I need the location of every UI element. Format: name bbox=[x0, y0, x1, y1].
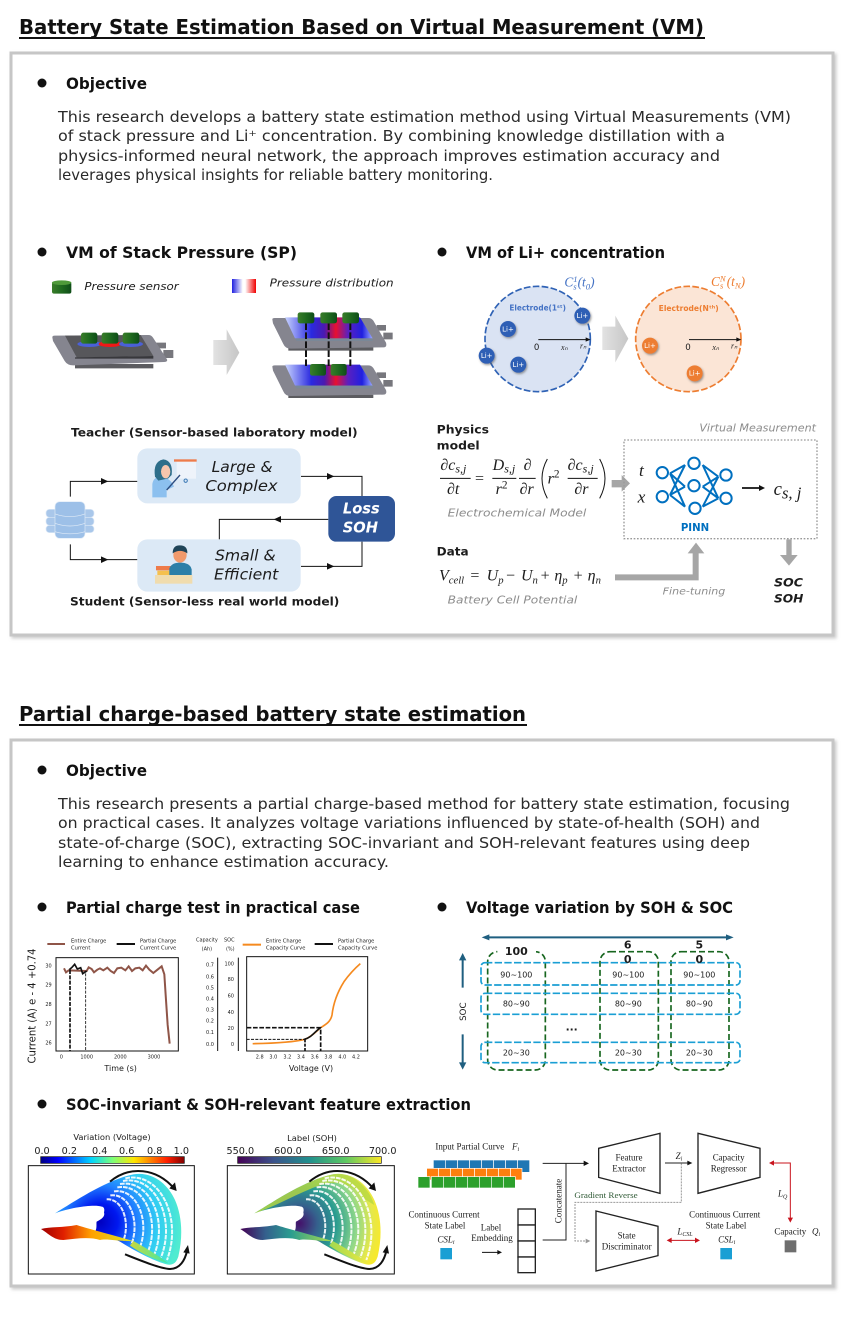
caption: electrochemical model: Electrochemical Model bbox=[448, 507, 586, 520]
equation: cell potential: p bbox=[561, 575, 568, 586]
icon: teacher bbox=[152, 459, 197, 497]
block: capacity regressor: Regressor bbox=[711, 1164, 747, 1174]
connector: concatenate bbox=[543, 1161, 589, 1240]
chart: current versus time: 1000 bbox=[80, 1054, 93, 1060]
output: capacity bbox=[774, 1226, 820, 1252]
labels: SOH values: 100 bbox=[505, 945, 528, 958]
text block: research objective: of stack pressure and Li⁺ concentration. By combining knowledge distillation with a bbox=[58, 127, 725, 145]
labels: SOC ranges: 20~30 bbox=[503, 1049, 530, 1058]
chart: capacity versus voltage bbox=[196, 938, 377, 1073]
block: feature extractor bbox=[599, 1133, 660, 1193]
label: SOC SOH outputs: SOH bbox=[774, 592, 804, 606]
title: partial charge estimation: Partial charge-based battery state estimation bbox=[19, 702, 526, 726]
plot: variation voltage: Variation (Voltage) bbox=[73, 1132, 151, 1142]
equation: diffusion: ∂r bbox=[574, 481, 589, 498]
input: continuous current state label bbox=[408, 1210, 480, 1259]
equation: cell potential: n bbox=[596, 575, 601, 586]
text block: research objective: leverages physical insights for reliable battery monitoring. bbox=[58, 166, 493, 184]
labels: SOC ranges: 90~100 bbox=[612, 970, 644, 979]
equation: cell potential: V bbox=[439, 568, 451, 585]
legend: current curves: Current bbox=[71, 946, 90, 952]
plot: variation voltage: 0.6 bbox=[119, 1146, 134, 1157]
icon: PINN network bbox=[657, 458, 732, 534]
label: teacher: Teacher (Sensor-based laboratory model) bbox=[71, 426, 358, 440]
equation: cell potential: cell bbox=[449, 575, 464, 586]
equation: diffusion: ∂t bbox=[447, 481, 460, 498]
chart: capacity versus voltage: 0.7 bbox=[206, 963, 214, 969]
arrow: physics to PINN bbox=[612, 475, 630, 492]
electrode: first cycle: (t bbox=[578, 275, 586, 290]
electrode: first cycle: 0 bbox=[534, 343, 539, 353]
labels: SOC ranges: 20~30 bbox=[686, 1049, 713, 1058]
chart: capacity versus voltage: 3.8 bbox=[324, 1054, 332, 1060]
chart: capacity versus voltage: 4.2 bbox=[352, 1054, 360, 1060]
input: partial curve blocks bbox=[418, 1141, 530, 1188]
chart: capacity versus voltage: 20 bbox=[228, 1026, 234, 1032]
legend: pressure distribution: Pressure distribution bbox=[270, 277, 394, 290]
box: loss SOH: Loss bbox=[343, 501, 380, 518]
equation: diffusion: D bbox=[493, 457, 504, 474]
electrode: Nth cycle bbox=[636, 273, 746, 392]
labels: SOC ranges bbox=[500, 970, 715, 1058]
chart: current versus time: 29 bbox=[45, 983, 52, 989]
heading: VM of Li+ concentration: VM of Li+ concentration bbox=[466, 243, 665, 262]
diagram: stack pressure virtual measurement bbox=[46, 277, 395, 609]
text: small and efficient: Efficient bbox=[214, 567, 280, 584]
plot: label SOH: 600.0 bbox=[274, 1146, 302, 1157]
legend: capacity curves: Partial Charge bbox=[338, 939, 374, 945]
icon: battery with sensors bbox=[52, 333, 173, 368]
heading: feature extraction: SOC-invariant & SOH-relevant feature extraction bbox=[66, 1095, 471, 1114]
plot: variation voltage: 0.8 bbox=[147, 1146, 162, 1157]
electrode: first cycle: ) bbox=[589, 275, 595, 290]
text block: research objective bbox=[57, 108, 791, 184]
text: small and efficient: Small & bbox=[215, 548, 276, 565]
electrode: Nth cycle: Li+ bbox=[689, 370, 701, 378]
input: continuous current state label: CSL bbox=[437, 1234, 453, 1244]
equation: cell potential: − bbox=[506, 568, 515, 585]
legend: pressure sensor: Pressure sensor bbox=[84, 280, 180, 293]
label: SOC SOH outputs bbox=[774, 575, 804, 606]
text block: research objective: This research develops a battery state estimation method using Virtual Measurements (VM) bbox=[57, 108, 791, 126]
legend: capacity curves: Capacity Curve bbox=[266, 946, 305, 952]
labels: SOC ranges: 90~100 bbox=[500, 970, 532, 979]
equation: diffusion: ∂c bbox=[440, 457, 455, 474]
icon: PINN network: PINN bbox=[681, 521, 709, 534]
output: continuous current state label bbox=[689, 1210, 761, 1259]
plot: label SOH: 550.0 bbox=[227, 1146, 254, 1157]
electrode: first cycle: 0 bbox=[586, 281, 591, 291]
label: c s,j: s, j bbox=[782, 483, 802, 502]
title: battery state estimation: Battery State Estimation Based on Virtual Measurement (VM) bbox=[19, 15, 704, 39]
axis: SOC bbox=[459, 953, 469, 1070]
text: large and complex: Large & bbox=[212, 459, 273, 476]
equation: diffusion bbox=[440, 457, 605, 498]
input: partial curve blocks: Input Partial Curve bbox=[435, 1141, 504, 1151]
box: virtual measurement: t bbox=[639, 461, 645, 480]
caption: virtual measurement: Virtual Measurement bbox=[699, 423, 817, 435]
plot: variation voltage: 0.0 bbox=[34, 1146, 50, 1157]
legend: current curves: Current Curve bbox=[140, 946, 176, 952]
text block: research objective: physics-informed neural network, the approach improves estimation accuracy and bbox=[58, 147, 720, 165]
equation: diffusion: 2 bbox=[554, 468, 560, 480]
chart: capacity versus voltage: 100 bbox=[224, 961, 234, 967]
electrode: first cycle: Electrode(1ˢᵗ) bbox=[509, 303, 566, 312]
loss: L Q: L bbox=[778, 1189, 783, 1199]
electrode: first cycle: xₙ bbox=[560, 343, 569, 352]
equation: diffusion: = bbox=[475, 470, 484, 487]
arrowheads bbox=[101, 473, 334, 570]
icon: upper battery with pressure map bbox=[272, 317, 393, 351]
label: label embedding: Embedding bbox=[471, 1233, 513, 1243]
panel: partial charge research bbox=[11, 740, 833, 1286]
plot: variation voltage bbox=[28, 1132, 194, 1274]
labels: SOC ranges: 80~90 bbox=[503, 1000, 530, 1009]
box: student model bbox=[137, 539, 301, 592]
label: data: Data bbox=[437, 545, 469, 559]
equation: cell potential: η bbox=[588, 568, 596, 585]
legend: pressure sensor bbox=[52, 280, 180, 294]
block: state discriminator: State bbox=[618, 1231, 636, 1241]
caption: fine-tuning: Fine-tuning bbox=[663, 587, 725, 598]
electrode: first cycle: Li+ bbox=[512, 361, 524, 369]
loss: L CSL: CSL bbox=[682, 1232, 693, 1238]
arrow: cycle progression bbox=[602, 316, 628, 362]
loss: L Q bbox=[769, 1160, 793, 1223]
electrode: Nth cycle: 0 bbox=[685, 343, 691, 353]
diagram: Li+ concentration virtual measurement bbox=[437, 273, 817, 607]
legend: capacity curves: (Ah) bbox=[202, 947, 212, 953]
connector: gradient reverse: Gradient Reverse bbox=[574, 1191, 638, 1200]
equation: diffusion: s,j bbox=[455, 462, 467, 476]
labels: SOC ranges: 80~90 bbox=[686, 1000, 713, 1009]
equation: cell potential: + bbox=[574, 568, 583, 585]
rows: SOC groups bbox=[481, 963, 740, 1063]
block: feature extractor: Feature bbox=[616, 1153, 642, 1163]
label: ellipsis: ... bbox=[566, 1020, 578, 1033]
chart: current versus time bbox=[26, 939, 178, 1073]
box: teacher model bbox=[137, 448, 301, 503]
text: large and complex bbox=[205, 459, 278, 495]
panel: virtual measurement research bbox=[11, 53, 833, 635]
electrode: first cycle bbox=[479, 274, 595, 392]
labels: SOH values: 0 bbox=[696, 953, 704, 966]
chart: capacity versus voltage: 0.4 bbox=[206, 997, 214, 1003]
block: feature extractor: Extractor bbox=[612, 1164, 646, 1174]
chart: capacity versus voltage: 0.2 bbox=[206, 1019, 214, 1025]
connector: latent Z: Z bbox=[676, 1151, 681, 1161]
input: continuous current state label: Continuous Current bbox=[408, 1210, 480, 1220]
box: loss SOH: SOH bbox=[343, 520, 378, 537]
block: state discriminator bbox=[596, 1211, 658, 1271]
chart: capacity versus voltage: Voltage (V) bbox=[289, 1064, 333, 1073]
electrode: Nth cycle: N bbox=[719, 273, 727, 283]
connector: concatenate: Concatenate bbox=[554, 1179, 564, 1223]
labels: SOH values: 5 bbox=[696, 938, 703, 951]
plot: label SOH: 700.0 bbox=[369, 1146, 396, 1157]
text: large and complex: Complex bbox=[205, 478, 278, 495]
loss: L CSL: L bbox=[677, 1226, 682, 1236]
caption: battery cell potential: Battery Cell Potential bbox=[448, 594, 577, 607]
equation: cell potential: n bbox=[533, 575, 538, 586]
legend: capacity curves: Entire Charge bbox=[266, 939, 301, 945]
chart: capacity versus voltage: 0.0 bbox=[206, 1042, 214, 1048]
chart: capacity versus voltage: 0.6 bbox=[206, 974, 214, 980]
diagram: voltage variation grid bbox=[459, 934, 740, 1070]
label: SOC SOH outputs: SOC bbox=[774, 575, 803, 589]
electrode: first cycle: 1 bbox=[573, 274, 578, 284]
electrode: Nth cycle: Electrode(Nᵗʰ) bbox=[659, 304, 719, 313]
plot: variation voltage: 0.2 bbox=[62, 1146, 77, 1157]
chart: capacity versus voltage: 0 bbox=[231, 1042, 234, 1048]
box: virtual measurement: x bbox=[637, 488, 646, 507]
output: continuous current state label: State Label bbox=[706, 1220, 747, 1230]
electrode: Nth cycle: rₙ bbox=[731, 342, 738, 351]
legend: capacity curves: SOC bbox=[224, 938, 235, 944]
chart: capacity versus voltage: 60 bbox=[228, 993, 234, 999]
equation: cell potential: p bbox=[497, 575, 504, 586]
diagram: domain adaptation network bbox=[408, 1133, 820, 1273]
chart: capacity versus voltage: 80 bbox=[228, 977, 234, 983]
chart: current versus time: Time (s) bbox=[103, 1064, 137, 1073]
arrow: PINN output bbox=[742, 485, 765, 491]
text block: research objective: This research presents a partial charge-based method for battery state estimation, focusing bbox=[57, 795, 790, 813]
icon: projected sensors bbox=[298, 312, 359, 376]
chart: current versus time: 27 bbox=[45, 1021, 52, 1027]
labels: SOH values bbox=[497, 938, 704, 966]
legend: capacity curves: (%) bbox=[226, 947, 235, 953]
electrode: first cycle: Li+ bbox=[481, 352, 493, 360]
chart: current versus time: 30 bbox=[45, 963, 52, 969]
equation: diffusion: r bbox=[496, 481, 502, 498]
plot: label SOH: Label (SOH) bbox=[287, 1133, 337, 1143]
labels: SOC ranges: 80~90 bbox=[615, 1000, 642, 1009]
arrow: to outputs bbox=[780, 539, 798, 566]
block: capacity regressor: Capacity bbox=[713, 1153, 745, 1163]
heading: VM of stack pressure: VM of Stack Pressure (SP) bbox=[66, 243, 297, 262]
text block: research objective: learning to enhance estimation accuracy. bbox=[58, 853, 389, 871]
electrode: first cycle: Li+ bbox=[576, 312, 588, 320]
labels: SOC ranges: 20~30 bbox=[615, 1049, 642, 1058]
plot: variation voltage: 0.4 bbox=[92, 1146, 107, 1157]
output: capacity: Capacity bbox=[774, 1226, 807, 1236]
input: partial curve blocks: F bbox=[512, 1141, 517, 1151]
connector: latent Z bbox=[665, 1151, 692, 1165]
arrow: fine-tuning bbox=[615, 543, 704, 580]
text block: research objective: state-of-charge (SOC), extracting SOC-invariant and SOH-relevant features using deep bbox=[58, 834, 750, 852]
electrode: Nth cycle: xₙ bbox=[711, 343, 720, 352]
electrode: Nth cycle: (t bbox=[727, 274, 735, 289]
block: state discriminator: Discriminator bbox=[602, 1242, 652, 1252]
label: label embedding bbox=[471, 1222, 513, 1255]
labels: SOC ranges: 90~100 bbox=[683, 970, 715, 979]
electrode: Nth cycle: Li+ bbox=[644, 342, 656, 350]
chart: current versus time: 28 bbox=[45, 1002, 52, 1008]
equation: cell potential: U bbox=[487, 568, 500, 585]
plots: latent space scatter bbox=[28, 1132, 396, 1274]
icon: student bbox=[155, 545, 192, 584]
flow lines: knowledge distillation bbox=[70, 476, 362, 566]
block: capacity regressor bbox=[698, 1133, 760, 1193]
input: continuous current state label: State Label bbox=[425, 1220, 466, 1230]
chart: current versus time: 2000 bbox=[114, 1054, 127, 1060]
charts: partial charge test bbox=[26, 938, 377, 1073]
icon: database bbox=[46, 502, 94, 538]
labels: SOH values: 0 bbox=[624, 953, 632, 966]
input: continuous current state label: i bbox=[453, 1240, 455, 1246]
electrode: first cycle: rₙ bbox=[580, 342, 587, 351]
plot: label SOH bbox=[227, 1133, 396, 1274]
connector: gradient reverse bbox=[574, 1163, 681, 1243]
equation: cell potential: η bbox=[554, 568, 562, 585]
equation: diffusion: 2 bbox=[502, 480, 508, 492]
label: physics model: model bbox=[437, 438, 480, 452]
heading: objective: Objective bbox=[66, 761, 147, 780]
equation: cell potential: U bbox=[521, 568, 534, 585]
chart: capacity versus voltage: 0.1 bbox=[206, 1030, 214, 1036]
text: small and efficient bbox=[214, 548, 280, 584]
arrow: to pressure distribution bbox=[213, 329, 239, 375]
icon: lower battery with pressure map bbox=[272, 365, 393, 398]
label: c s,j: c bbox=[774, 479, 782, 500]
box: loss SOH bbox=[328, 496, 395, 542]
text block: research objective: on practical cases. It analyzes voltage variations influenced by state-of-health (SOH) and bbox=[58, 814, 760, 832]
legend: capacity curves bbox=[196, 938, 377, 953]
heading: objective: Objective bbox=[66, 74, 147, 93]
legend: current curves: Entire Charge bbox=[71, 939, 106, 945]
output: capacity: i bbox=[818, 1232, 820, 1238]
equation: diffusion: ∂c bbox=[568, 457, 583, 474]
electrode: first cycle: C bbox=[564, 275, 573, 290]
loss: L Q: Q bbox=[783, 1194, 788, 1200]
label: student: Student (Sensor-less real world model) bbox=[70, 595, 339, 609]
axis: SOC: SOC bbox=[459, 1002, 469, 1021]
electrode: Nth cycle: ) bbox=[740, 274, 746, 289]
label: physics model: Physics bbox=[437, 422, 489, 436]
connectors: sensor projections bbox=[306, 323, 350, 366]
legend: current curves bbox=[47, 939, 176, 952]
equation: diffusion: ∂ bbox=[524, 457, 532, 474]
label: label embedding: Label bbox=[481, 1222, 502, 1232]
columns: SOH groups bbox=[488, 952, 729, 1070]
output: continuous current state label: CSL bbox=[718, 1234, 734, 1244]
box: virtual measurement bbox=[624, 440, 817, 539]
heading: voltage variation: Voltage variation by SOH & SOC bbox=[466, 898, 733, 917]
text block: research objective bbox=[57, 795, 790, 871]
legend: capacity curves: Capacity bbox=[196, 938, 218, 944]
output: continuous current state label: i bbox=[734, 1240, 736, 1246]
output: capacity: Q bbox=[812, 1226, 818, 1236]
electrode: first cycle: s bbox=[573, 281, 577, 291]
equation: diffusion: s,j bbox=[504, 462, 516, 476]
heading: partial charge test: Partial charge test in practical case bbox=[66, 898, 360, 917]
equation: cell potential: + bbox=[541, 568, 550, 585]
chart: capacity versus voltage: 3.2 bbox=[283, 1054, 291, 1060]
chart: capacity versus voltage: 3.0 bbox=[269, 1054, 277, 1060]
chart: capacity versus voltage: 2.8 bbox=[256, 1054, 264, 1060]
legend: pressure distribution bbox=[232, 277, 394, 293]
electrode: first cycle: Li+ bbox=[502, 325, 514, 333]
chart: capacity versus voltage: 40 bbox=[228, 1010, 234, 1016]
loss: L CSL bbox=[667, 1226, 700, 1243]
legend: current curves: Partial Charge bbox=[140, 939, 176, 945]
electrode: Nth cycle: N bbox=[734, 281, 742, 291]
chart: current versus time: Current (A) e - 4 +0.74 bbox=[26, 948, 39, 1063]
chart: capacity versus voltage: 0.3 bbox=[206, 1008, 214, 1014]
axis: SOH bbox=[482, 934, 734, 940]
block: embedding vector bbox=[518, 1209, 535, 1273]
equation: diffusion: s,j bbox=[583, 462, 594, 476]
label: physics model bbox=[437, 422, 489, 452]
output: continuous current state label: Continuous Current bbox=[689, 1210, 761, 1220]
labels: SOH values: 6 bbox=[624, 938, 632, 951]
chart: current versus time: 0 bbox=[60, 1054, 63, 1060]
chart: capacity versus voltage: 0.5 bbox=[206, 985, 214, 991]
equation: cell potential: = bbox=[470, 568, 479, 585]
input: partial curve blocks: i bbox=[517, 1147, 519, 1153]
equation: diffusion: ∂r bbox=[520, 481, 535, 498]
electrode: Nth cycle: C bbox=[711, 274, 720, 289]
chart: capacity versus voltage: 3.6 bbox=[311, 1054, 319, 1060]
chart: current versus time: 26 bbox=[45, 1041, 52, 1047]
electrode: Nth cycle: s bbox=[720, 281, 724, 291]
connector: latent Z: i bbox=[681, 1157, 683, 1163]
chart: capacity versus voltage: 3.4 bbox=[297, 1054, 305, 1060]
plot: label SOH: 650.0 bbox=[322, 1146, 349, 1157]
legend: capacity curves: Capacity Curve bbox=[338, 946, 377, 952]
chart: capacity versus voltage: 4.0 bbox=[338, 1054, 346, 1060]
plot: variation voltage: 1.0 bbox=[174, 1146, 189, 1157]
equation: diffusion: r bbox=[548, 470, 554, 487]
chart: current versus time: 3000 bbox=[148, 1054, 160, 1060]
